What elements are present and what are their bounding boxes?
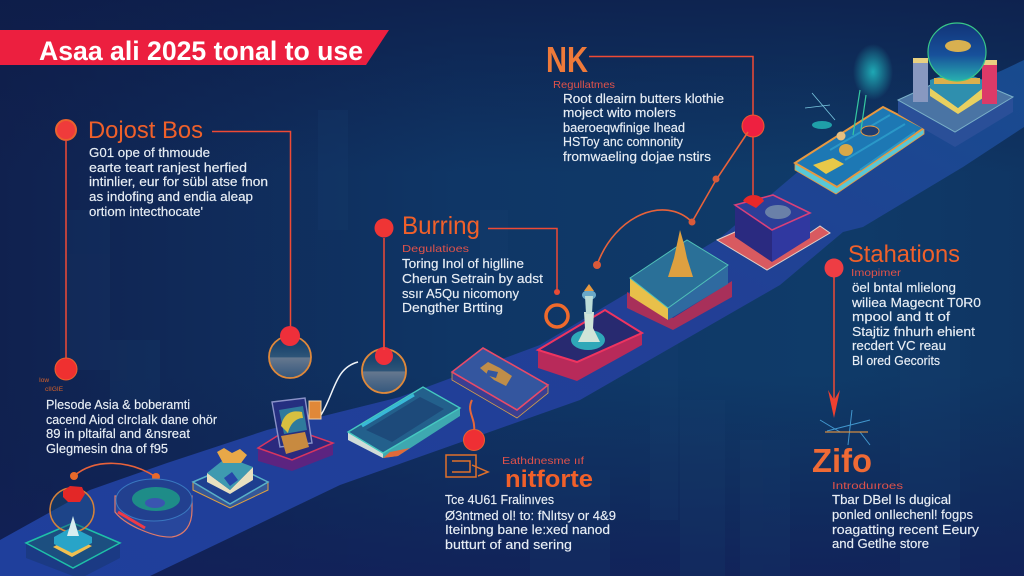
text block: Plesode Asia & boberamti (46, 398, 190, 412)
text block: ssır A5Qu nicomony (402, 287, 520, 301)
title: Asaa ali 2025 tonal to use (39, 36, 363, 66)
text block (402, 257, 544, 315)
text block: and Getlhe store (832, 537, 929, 551)
text block: Iteinbng bane le:xed nanod (445, 523, 610, 537)
text block: baeroeqwfinige lhead (563, 121, 685, 135)
step 2: disc device (115, 479, 192, 537)
step 4: rainbow card box (258, 398, 333, 471)
text block: Tce 4U61 Fralinıves (445, 493, 554, 507)
text block: roagatting recent Eeury (832, 523, 980, 537)
step 11: crystal-ball city (898, 23, 1013, 147)
step 3: layered cake platform (193, 448, 268, 508)
text block: mpool and tt of (852, 310, 951, 324)
light beam and sparks (805, 44, 893, 135)
text block: moject wito molers (563, 106, 676, 120)
curved connector lower (70, 463, 160, 481)
text block: as indofing and endia aleap (89, 190, 253, 204)
text block: Toring Inol of higlline (402, 257, 524, 271)
panel: Zifo: Introduıroes (832, 480, 903, 492)
curved connector upper (593, 132, 748, 269)
text block: intinlier, eur for sübl atse fnon (89, 175, 268, 189)
text block: ponled onIlechenl! fogps (832, 508, 973, 522)
panel: Stahations: Imopimer (851, 267, 902, 279)
text block (851, 281, 981, 368)
text block: Tbar DBel Is dugical (832, 493, 951, 507)
heading: Stahations (848, 241, 960, 268)
text block: ortiom intecthocate' (89, 205, 203, 219)
text block: Stajtiz fnhurh ehient (852, 325, 976, 339)
text block: Dengther Brtting (402, 301, 503, 315)
icon: document (446, 455, 488, 477)
title banner (0, 30, 389, 66)
text block (445, 493, 616, 552)
panel: Zifo (812, 442, 980, 551)
heading: Burring (402, 212, 480, 240)
text block: öel bntal mlielong (852, 281, 956, 295)
text block (563, 92, 724, 164)
white connector (321, 362, 358, 415)
text block: Root dleairn butters klothie (563, 92, 724, 106)
step 9: purple cube on tray (717, 195, 830, 270)
lens marker 1 (269, 326, 311, 378)
step 10: glowing control table (795, 107, 924, 194)
panel: lower-left note (39, 358, 217, 456)
text block: Ø3ntmed ol! to: fNlıtsy or 4&9 (445, 509, 616, 523)
panel: Burring: Degulatioes (402, 243, 469, 255)
heading: Dojost Bos (88, 117, 203, 144)
text block: HSToy anc comnonity (563, 135, 684, 149)
lens marker 2 (362, 320, 406, 393)
text block: recdert VC reau (852, 339, 946, 353)
text block: fromwaeling dojae nstirs (563, 150, 711, 164)
text block: G01 ope of thmoude (89, 146, 210, 160)
panel: NK (546, 39, 764, 195)
heading: NK (546, 39, 588, 80)
panel: Burring (374, 212, 560, 350)
text block: Bl ored Gecorits (852, 354, 940, 368)
text block (89, 146, 268, 219)
text block: butturt of and sering (445, 538, 572, 552)
sparkle icon (820, 410, 870, 445)
text block: Glegmesin dna of f95 (46, 442, 168, 456)
step 6: book device (452, 348, 548, 418)
panel: NK: Regullatmes (553, 79, 615, 91)
step 1: beacon platform (26, 486, 120, 576)
text block: Cherun Setrain by adst (402, 272, 544, 286)
panel: Dojost Bos (56, 117, 290, 360)
step 8: glass block with temple (627, 230, 732, 330)
panel: nitforte (445, 400, 616, 552)
text block (832, 493, 980, 551)
step 5: tablet slab (348, 387, 460, 458)
step 7: tower on red platform (538, 284, 642, 381)
text block: wiliea Magecnt T0R0 (851, 296, 981, 310)
panel: lower-left note: Iow (39, 377, 49, 384)
orange ring (546, 305, 568, 327)
panel: lower-left note: cIIGIE (45, 386, 64, 393)
panel: Stahations (824, 241, 981, 418)
text block: cacend Aiod cIrcIaIk dane ohör (46, 413, 217, 427)
text block (46, 398, 217, 456)
heading: Zifo (812, 442, 872, 479)
panel: nitforte: Eathdnesme ııf (502, 455, 584, 467)
text block: earte teart ranjest herfied (89, 161, 247, 175)
heading: nitforte (505, 466, 593, 493)
text block: 89 in pltaifal and &nsreat (46, 427, 191, 441)
